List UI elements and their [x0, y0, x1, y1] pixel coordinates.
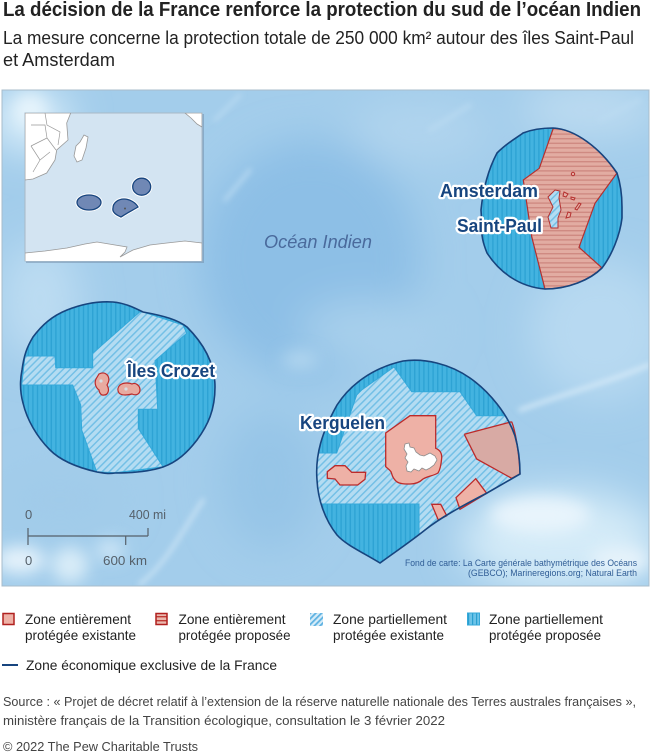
scale bar: 0	[25, 553, 32, 568]
Kerguelen EEZ	[300, 360, 530, 563]
place labels: Amsterdam	[440, 181, 538, 201]
label: ocean: Océan Indien	[264, 232, 372, 252]
legend	[2, 611, 603, 673]
legend: proposed partially protected: Zone partiellement	[489, 611, 603, 627]
islands	[548, 190, 561, 228]
Crozet fully protected zones	[95, 373, 109, 395]
map panel	[0, 85, 650, 590]
legend: proposed fully protected: protégée proposée	[178, 627, 291, 643]
copyright: © 2022 The Pew Charitable Trusts	[3, 740, 198, 754]
subtitle	[3, 28, 634, 70]
legend: exclusive economic zone: Zone économique exclusive de la France	[26, 657, 277, 673]
inset locator map	[25, 113, 204, 263]
place labels: Îles Crozet	[126, 360, 215, 381]
Kerguelen west protected zone	[327, 466, 366, 485]
Kerguelen central protected zone	[386, 416, 442, 484]
ocean background	[0, 85, 650, 590]
place labels	[126, 181, 542, 433]
Amsterdam and Saint-Paul EEZ	[481, 128, 622, 289]
source note: Source : « Projet de décret relatif à l’extension de la réserve naturelle nationale des Terres australes françaises »,	[3, 695, 636, 709]
Crozet partial existing zone	[22, 312, 187, 473]
subtitle: La mesure concerne la protection totale de 250 000 km² autour des îles Saint-Paul	[3, 28, 634, 48]
Madagascar	[74, 135, 88, 162]
scale bar	[25, 507, 166, 568]
legend: existing partially protected: protégée existante	[333, 627, 444, 643]
legend: proposed partially protected	[468, 611, 603, 643]
scale bar: 400 mi	[129, 507, 166, 522]
place labels: Saint-Paul	[457, 216, 542, 236]
legend: existing fully protected: protégée existante	[25, 627, 136, 643]
legend: proposed fully protected: Zone entièrement	[178, 611, 286, 627]
proposed fully protected zone	[523, 128, 617, 289]
Kerguelen EEZ outline	[317, 360, 520, 563]
Kerguelen partial existing zone	[318, 366, 520, 534]
legend: proposed partially protected: protégée proposée	[489, 627, 601, 643]
inset EEZ blobs	[77, 178, 151, 217]
legend: existing partially protected: Zone partiellement	[333, 611, 447, 627]
Africa	[25, 113, 71, 180]
Crozet EEZ	[21, 302, 215, 473]
Australia corner	[185, 113, 202, 127]
legend: existing partially protected	[310, 611, 447, 643]
Kerguelen south protected zones	[432, 479, 487, 520]
map credit: (GEBCO); Marineregions.org; Natural Earth	[468, 568, 637, 579]
Kerguelen east protected zone	[465, 423, 520, 478]
scale bar: 0	[25, 507, 32, 522]
scale bar: 600 km	[103, 553, 147, 568]
legend: existing fully protected: Zone entièrement	[25, 611, 131, 627]
map credit	[406, 560, 637, 578]
Crozet EEZ outline	[21, 302, 215, 473]
subtitle: et Amsterdam	[3, 50, 115, 70]
EEZ outline	[481, 128, 622, 289]
legend: proposed fully protected	[156, 611, 291, 643]
place labels: Kerguelen	[300, 413, 385, 433]
source note: ministère français de la Transition écologique, consultation le 3 février 2022	[3, 714, 445, 728]
Antarctica	[25, 241, 202, 262]
Kerguelen island	[404, 443, 437, 472]
source note	[3, 695, 636, 728]
legend: existing fully protected	[3, 611, 136, 643]
